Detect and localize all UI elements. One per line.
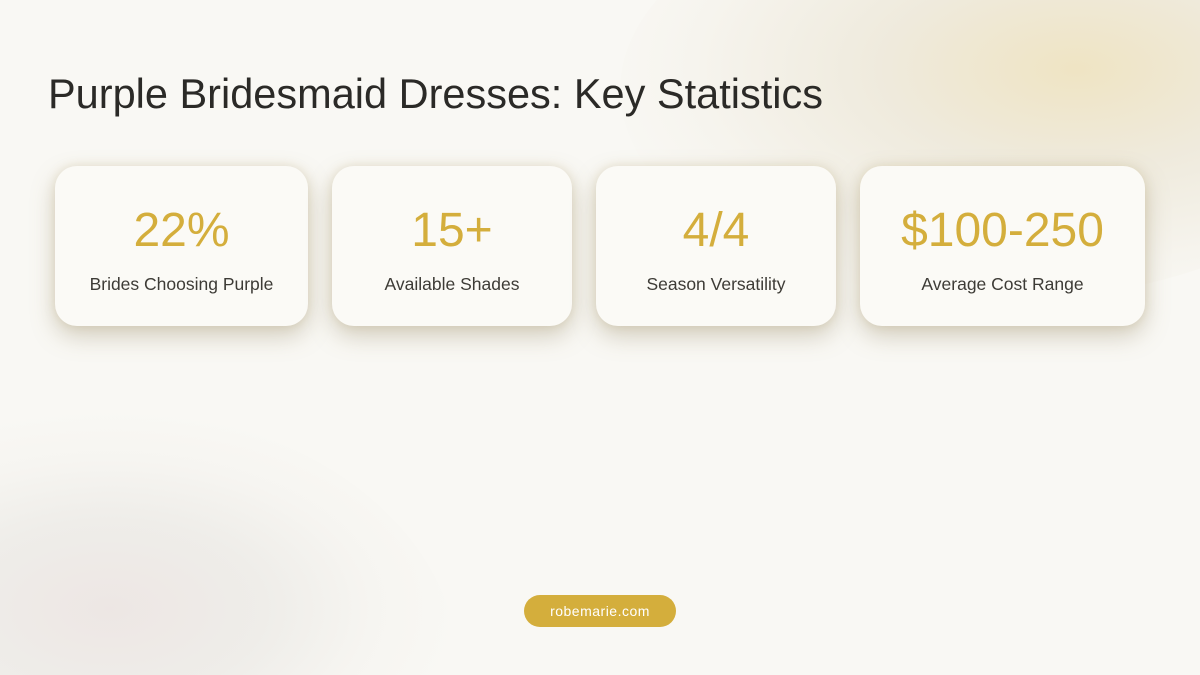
card: brides choosing purple: 22%: [133, 204, 230, 257]
footer pill: robemarie.com: [550, 603, 650, 619]
card: season versatility: 4/4: [683, 204, 749, 257]
card: available shades: [332, 166, 572, 326]
card: available shades: 15+: [411, 204, 493, 257]
footer pill: [524, 595, 676, 627]
card: average cost range: Average Cost Range: [921, 274, 1084, 294]
card: available shades: Available Shades: [385, 274, 519, 294]
card: season versatility: [596, 166, 836, 326]
card: average cost range: $100-250: [901, 204, 1104, 257]
card: season versatility: Season Versatility: [646, 274, 786, 294]
card: average cost range: [860, 166, 1145, 326]
title: Purple Bridesmaid Dresses: Key Statistics: [48, 70, 823, 117]
card: brides choosing purple: Brides Choosing Purple: [90, 274, 273, 294]
card: brides choosing purple: [55, 166, 308, 326]
